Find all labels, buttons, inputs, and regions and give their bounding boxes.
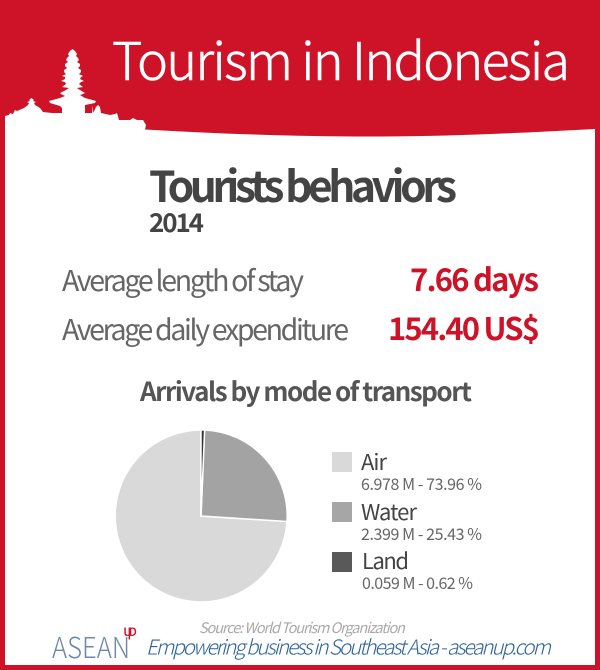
legend: air: 6.978 M - 73.96 % — [361, 471, 482, 495]
legend: land: 0.059 M - 0.62 % — [362, 570, 473, 594]
legend: air — [332, 445, 482, 495]
title: Tourism in Indonesia — [112, 20, 570, 95]
legend: water: Water — [361, 495, 417, 527]
legend: land: Land — [362, 544, 409, 576]
legend: water: 2.399 M - 25.43 % — [361, 521, 482, 545]
tagline: Empowering business in Southeast Asia - aseanup.com — [146, 630, 552, 660]
legend — [332, 445, 482, 594]
legend: water — [332, 495, 482, 545]
legend: land — [332, 544, 473, 594]
logo: ASEAN up: ASEAN — [52, 625, 130, 667]
chart heading: Arrivals by mode of transport — [139, 372, 472, 409]
logo: ASEAN up: up — [123, 617, 137, 641]
pie chart — [115, 430, 287, 602]
heading: Tourists behaviors — [149, 154, 457, 215]
stat: daily expenditure: 154.40 US$ — [388, 304, 540, 349]
stat: length of stay: 7.66 days — [410, 255, 539, 300]
stat: daily expenditure — [62, 304, 540, 349]
stat: length of stay — [62, 255, 539, 300]
legend: air: Air — [361, 445, 387, 477]
source: Source: World Tourism Organization — [199, 617, 406, 638]
year: 2014 — [149, 203, 204, 240]
stat: length of stay: Average length of stay — [62, 259, 304, 300]
stat: daily expenditure: Average daily expenditure — [62, 308, 349, 349]
